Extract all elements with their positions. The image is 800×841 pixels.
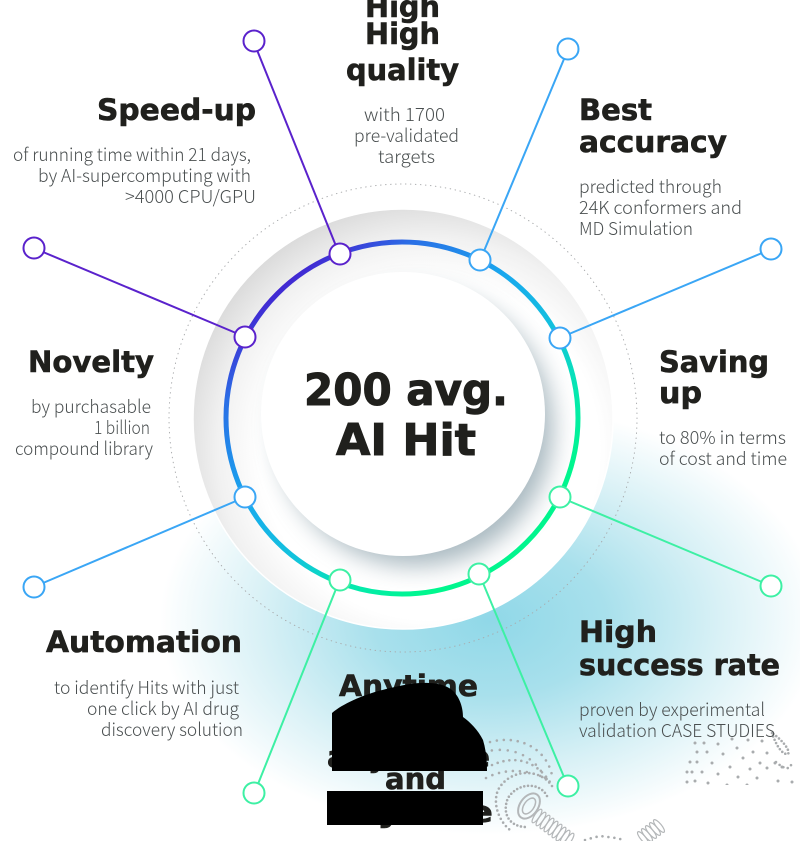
connector: saving up [550,238,782,348]
black redaction shape [332,683,487,771]
block: automation: to identify Hits with just [54,674,240,700]
inner disc shadow [277,290,553,566]
connector: high success rate (right) [550,486,782,596]
block: saving up [659,345,787,471]
block: high success rate: success rate [579,648,780,682]
connector: novelty [24,238,256,348]
block: speed-up: >4000 CPU/GPU [125,183,256,209]
block: novelty: 1 billion [94,414,150,440]
block: high success rate: validation CASE STUDIES [579,717,775,743]
block: high quality: pre-validated [354,122,459,148]
centre title [304,365,508,466]
block: high success rate [579,615,780,743]
block: saving up: Saving [659,345,769,379]
block: high quality: with 1700 [364,101,445,127]
block: automation [46,625,243,742]
block: high quality: quality [346,53,459,87]
block: automation: one click by AI drug [87,695,239,721]
block: best accuracy: 24K conformers and [579,194,742,220]
connector: speed-up [244,30,350,264]
block: saving up: of cost and time [659,445,787,471]
block: anytime: Anytime [339,669,478,703]
block: anytime: anywhere [327,740,490,774]
block: high quality [346,0,459,169]
dotted outer circle [169,184,637,652]
block: novelty: by purchasable [31,393,151,419]
centre title: AI Hit [336,415,476,466]
block: anytime: and [385,762,446,796]
block: saving up: to 80% in terms [659,424,786,450]
decoration: dotted spiral sphere [484,740,666,841]
block: novelty: Novelty [28,345,154,379]
black redaction bar [327,791,483,825]
block: high quality: High [365,17,440,51]
block: best accuracy: Best [579,93,652,127]
block: best accuracy: predicted through [579,173,722,199]
outer disc [193,209,613,629]
block: automation: Automation [46,625,242,659]
block: speed-up: of running time within 21 days, [13,141,251,167]
decoration: dotted pattern right [687,733,792,785]
block: saving up: up [659,376,702,410]
gradient ring [226,242,578,594]
inner disc [261,272,545,556]
block: best accuracy [579,93,742,241]
block: anytime [327,669,493,829]
block: high success rate: High [579,615,657,649]
block: best accuracy: accuracy [579,125,727,159]
block: speed-up [13,93,256,209]
block: anytime: anytime [327,795,493,829]
block: best accuracy: MD Simulation [579,215,693,241]
block: automation: discovery solution [101,716,243,742]
block: speed-up: Speed-up [97,93,256,127]
block: novelty [15,345,154,461]
connector: best accuracy [470,38,578,270]
centre title: 200 avg. [304,365,508,416]
block: speed-up: by AI-supercomputing with [38,162,251,188]
connector: automation [24,486,256,598]
block: novelty: compound library [15,435,153,461]
connector: high success rate (bottom) [468,564,578,796]
block: high success rate: proven by experimental [579,696,765,722]
block: high quality: targets [378,143,435,169]
connector: anytime [244,570,350,804]
